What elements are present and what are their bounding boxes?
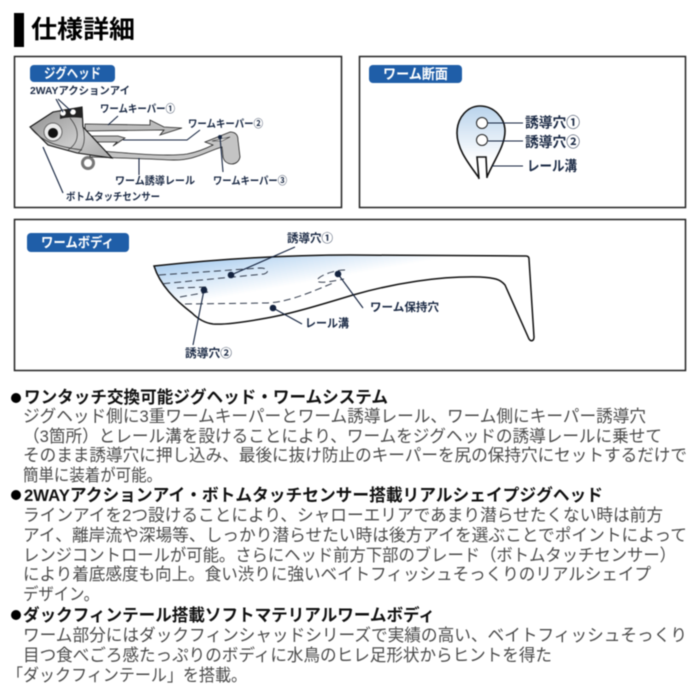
callout: ワーム保持穴: ワーム保持穴 [370, 300, 440, 314]
callout: ワーム保持穴 [338, 274, 440, 314]
callout: 誘導穴①: 誘導穴① [287, 231, 333, 245]
text block: ダックフィンテール搭載ソフトマテリアルワームボディ: 目つ食べごろ感たっぷりのボディに水鳥のヒレ足形状からヒントを得た [23, 645, 552, 665]
text block: ダックフィンテール搭載ソフトマテリアルワームボディ: 「ダックフィンテール」を搭載。 [7, 666, 247, 685]
worm cross-section diagram [457, 106, 523, 179]
callout: ワームキーパー② [123, 118, 263, 140]
panel heading: ジグヘッド: ジグヘッド [44, 66, 101, 82]
callout: レール溝 [273, 308, 349, 330]
panel heading: ワームボディ: ワームボディ [41, 234, 114, 250]
callout: ワームキーパー③ [213, 137, 287, 187]
panel heading: ワーム断面: ワーム断面 [383, 66, 448, 82]
text block: ワンタッチ交換可能ジグヘッド・ワームシステム: ワンタッチ交換可能ジグヘッド・ワームシステム [24, 387, 388, 407]
text block: 2WAYアクションアイ・ボトムタッチセンサー搭載リアルシェイプジグヘッド: 2WAYアクションアイ・ボトムタッチセンサー搭載リアルシェイプジグヘッド [24, 485, 603, 505]
text block: ワンタッチ交換可能ジグヘッド・ワームシステム: ジグヘッド側に3重ワームキーパーとワーム誘導レール、ワーム側にキーパー誘導穴 [23, 407, 646, 426]
title: 仕様詳細: 仕様詳細 [31, 16, 135, 44]
text block: 2WAYアクションアイ・ボトムタッチセンサー搭載リアルシェイプジグヘッド: ラインアイを2つ設けることにより、シャローエリアであまり潜らせたくない時は前方 [23, 506, 663, 525]
title: 仕様詳細 [14, 13, 135, 47]
callout: ワーム誘導レール [115, 158, 195, 187]
callout: 2WAYアクションアイ: 2WAYアクションアイ [30, 85, 130, 97]
callout: ワームキーパー③: ワームキーパー③ [213, 175, 287, 187]
callout: 誘導穴① [231, 231, 333, 275]
callout: ワームキーパー②: ワームキーパー② [188, 118, 263, 130]
text block: 2WAYアクションアイ・ボトムタッチセンサー搭載リアルシェイプジグヘッド: レンジコントロールが可能。さらにヘッド前方下部のブレード（ボトムタッチセンサー） [23, 545, 676, 565]
callout: ボトムタッチセンサー [43, 147, 160, 203]
text block: 2WAYアクションアイ・ボトムタッチセンサー搭載リアルシェイプジグヘッド: アイ、離岸流や深場等、しっかり潜らせたい時は後方アイを選ぶことでポイントによって [23, 526, 687, 545]
text block: ワンタッチ交換可能ジグヘッド・ワームシステム: （3箇所）とレール溝を設けることにより、ワームをジグヘッドの誘導レールに乗せて [23, 427, 662, 446]
text block: ワンタッチ交換可能ジグヘッド・ワームシステム [11, 387, 687, 485]
panel heading: ワーム断面 [369, 65, 462, 83]
text block: 2WAYアクションアイ・ボトムタッチセンサー搭載リアルシェイプジグヘッド: デザイン。 [23, 584, 99, 604]
panel heading: ワームボディ [27, 233, 129, 252]
text block: ワンタッチ交換可能ジグヘッド・ワームシステム: 簡単に装着が可能。 [23, 466, 162, 485]
text block: ワンタッチ交換可能ジグヘッド・ワームシステム: そのまま誘導穴に押し込み、最後に抜け防止のキーパーを尻の保持穴にセットするだけで [23, 446, 687, 465]
callout: 誘導穴② [185, 290, 233, 360]
label: 誘導穴①: 誘導穴① [525, 114, 580, 130]
callout: レール溝: レール溝 [305, 316, 349, 330]
callout: ボトムタッチセンサー: ボトムタッチセンサー [66, 191, 160, 203]
jig head illustration [30, 107, 240, 168]
callout: 誘導穴②: 誘導穴② [185, 346, 233, 360]
callout: ワームキーパー① [100, 103, 175, 125]
callout: 2WAYアクションアイ [30, 85, 130, 112]
label: 誘導穴②: 誘導穴② [525, 134, 580, 150]
worm body illustration [154, 255, 534, 341]
text block: 2WAYアクションアイ・ボトムタッチセンサー搭載リアルシェイプジグヘッド: により着底感度も向上。食い渋りに強いベイトフィッシュそっくりのリアルシェイプ [23, 565, 651, 584]
panel: ワームボディ [14, 220, 686, 370]
text block: ダックフィンテール搭載ソフトマテリアルワームボディ: ダックフィンテール搭載ソフトマテリアルワームボディ [23, 605, 435, 625]
panel: ワーム断面 [360, 56, 686, 208]
callout: ワームキーパー①: ワームキーパー① [100, 103, 175, 115]
label: レール溝: レール溝 [527, 158, 577, 174]
callout: ワーム誘導レール: ワーム誘導レール [115, 174, 195, 187]
text block: ダックフィンテール搭載ソフトマテリアルワームボディ: ワーム部分にはダックフィンシャッドシリーズで実績の高い、ベイトフィッシュそっくり [23, 626, 687, 645]
text block: ダックフィンテール搭載ソフトマテリアルワームボディ [7, 605, 687, 685]
text block: 2WAYアクションアイ・ボトムタッチセンサー搭載リアルシェイプジグヘッド [11, 485, 687, 604]
panel: ジグヘッド [14, 56, 342, 208]
